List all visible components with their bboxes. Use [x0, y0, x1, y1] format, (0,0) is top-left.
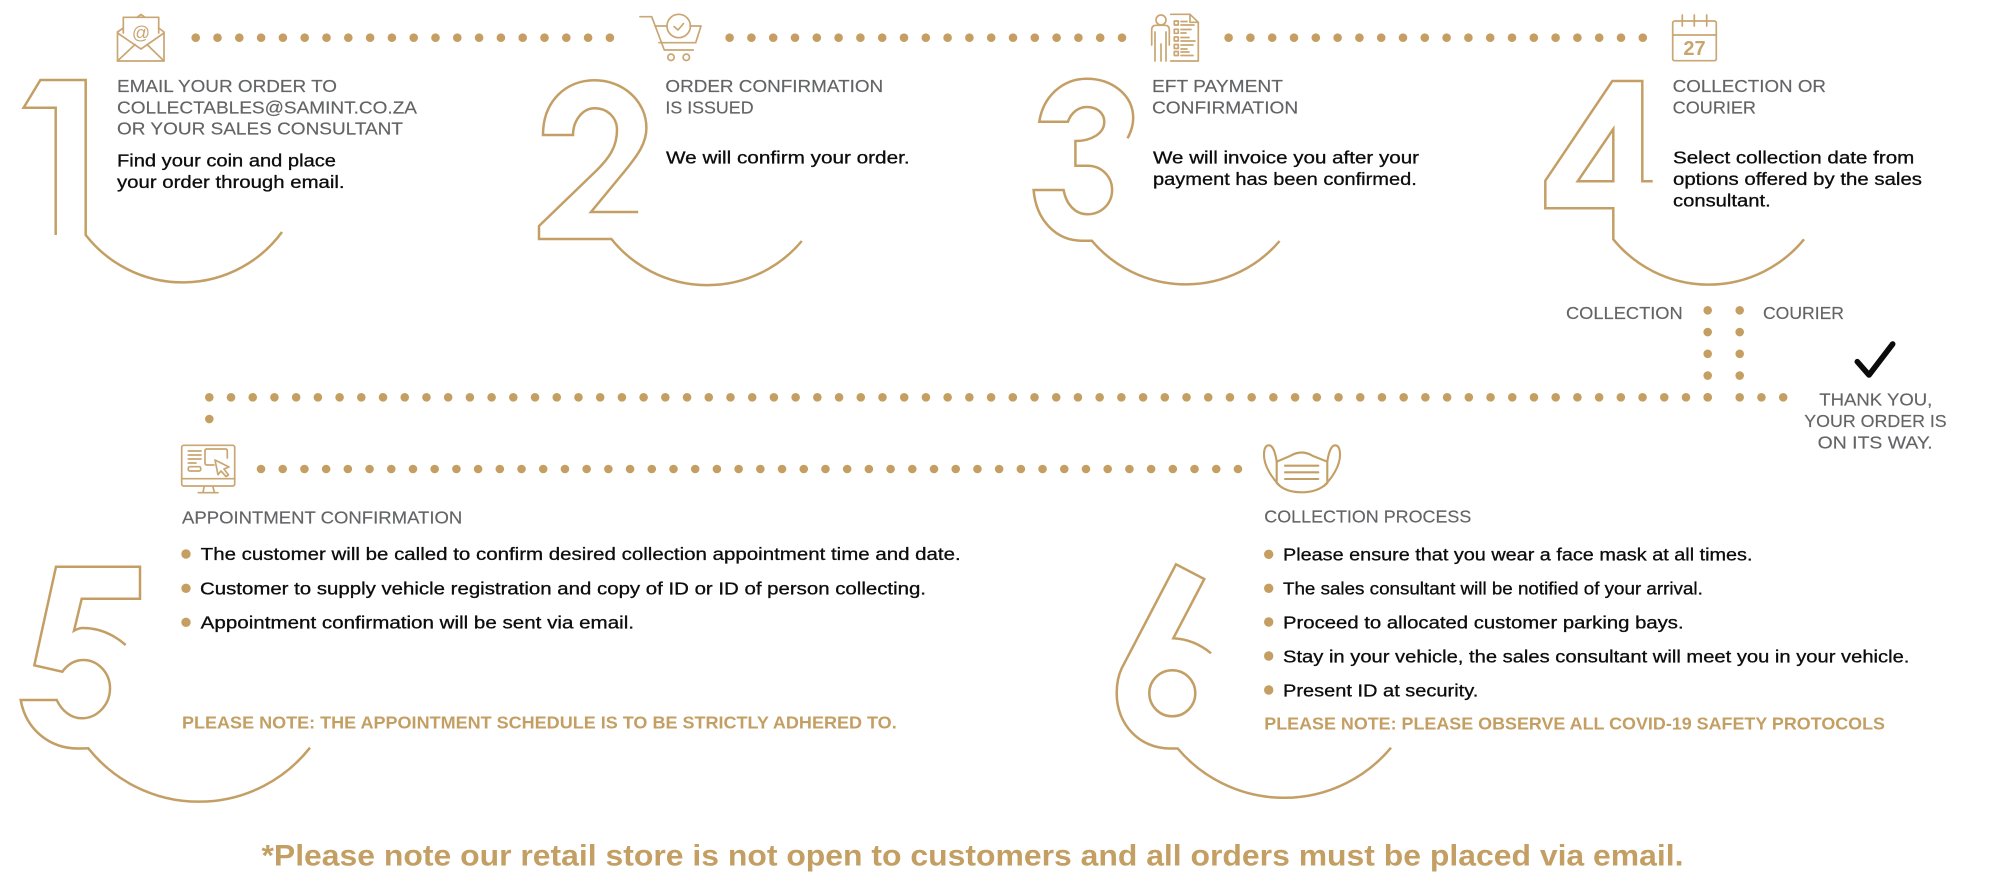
numeral 6 outline — [1117, 564, 1391, 798]
step 5 bullet list: Customer to supply vehicle registration and copy of ID or ID of person collecting. — [200, 578, 926, 598]
icon: person with checklist — [1152, 14, 1198, 61]
numeral 1 outline — [24, 80, 282, 282]
dotted connector: step 3 to 4 — [1229, 33, 1643, 42]
numeral 3 outline — [1034, 79, 1280, 284]
step 3: EFT payment — [1034, 14, 1419, 284]
numeral 6 inner circle — [1149, 670, 1195, 716]
label: courier branch: COURIER — [1763, 303, 1844, 323]
dotted connector: step 5 to 6 — [261, 465, 1238, 473]
step 1 heading — [117, 76, 418, 139]
step 6 bullet list — [1264, 544, 1909, 700]
step 5: appointment confirmation — [21, 445, 961, 802]
step 4 heading: COURIER — [1673, 97, 1756, 117]
step 6 bullet list: Please ensure that you wear a face mask at all times. — [1283, 544, 1752, 564]
icon: email envelope — [118, 14, 164, 61]
step 4 body: Select collection date from — [1673, 148, 1914, 168]
icon: calendar 27 — [1673, 15, 1716, 61]
numeral 5 outline — [21, 567, 310, 802]
dotted connector: courier branch down and right — [1740, 310, 1784, 397]
footer note: *Please note our retail store is not open to customers and all orders must be placed via email. — [262, 840, 1684, 872]
thank-you message — [1804, 390, 1947, 452]
step 6 heading: COLLECTION PROCESS — [1264, 507, 1471, 527]
step 6: collection process — [1117, 445, 1909, 798]
step 1 body: Find your coin and place — [117, 150, 336, 170]
label: collection branch: COLLECTION — [1566, 303, 1683, 323]
step 5 bullet list — [181, 544, 961, 632]
step 6 bullet list: Proceed to allocated customer parking bays. — [1283, 612, 1684, 632]
step 1 heading: OR YOUR SALES CONSULTANT — [117, 119, 404, 139]
step 1 heading: COLLECTABLES@SAMINT.CO.ZA — [117, 97, 418, 117]
step 1 body — [117, 150, 345, 192]
step 4 body — [1673, 148, 1922, 210]
step 3 heading: CONFIRMATION — [1152, 97, 1298, 117]
icon: calendar 27: 27 — [1683, 38, 1706, 60]
step 2: order confirmation — [539, 14, 910, 285]
step 3 body: We will invoice you after your — [1153, 148, 1419, 168]
step 6 bullet list: Stay in your vehicle, the sales consultant will meet you in your vehicle. — [1283, 646, 1909, 666]
icon: email envelope: @ — [132, 23, 150, 43]
step 6 bullet list: Present ID at security. — [1283, 680, 1478, 700]
numeral 4 outline — [1545, 81, 1804, 285]
dotted connector: step 1 to 2 — [196, 33, 610, 42]
step 1 body: your order through email. — [117, 172, 345, 192]
step 2 heading: IS ISSUED — [665, 97, 754, 117]
step 2 heading — [665, 76, 883, 117]
step 5 heading: APPOINTMENT CONFIRMATION — [182, 507, 462, 527]
step 5 note: PLEASE NOTE: THE APPOINTMENT SCHEDULE IS TO BE STRICTLY ADHERED TO. — [182, 713, 897, 733]
step 3 heading: EFT PAYMENT — [1152, 76, 1283, 96]
thank-you message: ON ITS WAY. — [1818, 432, 1933, 452]
step 6 bullet list: The sales consultant will be notified of your arrival. — [1283, 578, 1703, 598]
step 2 body: We will confirm your order. — [666, 148, 910, 168]
icon: computer monitor with cursor — [182, 445, 235, 493]
dotted connector: collection branch down — [1703, 310, 1712, 398]
step 4 heading — [1673, 76, 1826, 117]
step 6 note: PLEASE NOTE: PLEASE OBSERVE ALL COVID-19 SAFETY PROTOCOLS — [1264, 713, 1885, 733]
step 1 heading: EMAIL YOUR ORDER TO — [117, 76, 337, 96]
icon: black check mark — [1857, 344, 1893, 375]
step 5 bullet list: Appointment confirmation will be sent via email. — [201, 612, 634, 632]
step 3 body: payment has been confirmed. — [1153, 169, 1417, 189]
icon: shopping cart with check — [640, 14, 701, 61]
thank-you message: YOUR ORDER IS — [1804, 411, 1947, 431]
icon: face mask — [1264, 445, 1340, 492]
numeral 2 outline — [539, 80, 802, 285]
step 4 body: options offered by the sales — [1673, 169, 1922, 189]
step 4 heading: COLLECTION OR — [1673, 76, 1826, 96]
step 4 body: consultant. — [1673, 190, 1771, 210]
step 3 heading — [1152, 76, 1298, 117]
step 3 body — [1153, 148, 1419, 189]
step 1: email your order — [24, 14, 418, 282]
step 2 heading: ORDER CONFIRMATION — [665, 76, 883, 96]
dotted connector: row back to step 5 — [209, 397, 1708, 420]
thank-you message: THANK YOU, — [1819, 390, 1932, 410]
step 4: collection or courier — [1545, 15, 1922, 285]
step 5 bullet list: The customer will be called to confirm desired collection appointment time and date. — [201, 544, 961, 564]
dotted connector: step 2 to 3 — [730, 33, 1122, 42]
